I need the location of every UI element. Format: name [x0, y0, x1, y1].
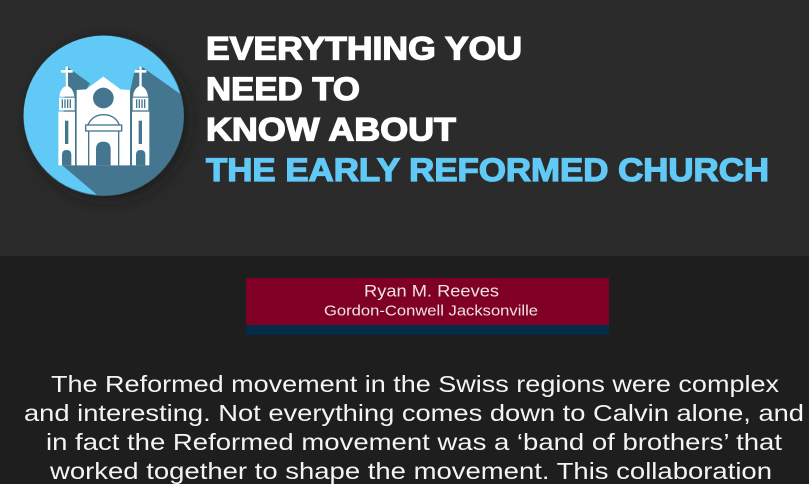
- intro text block: The Reformed movement in the Swiss regions were complex: [51, 371, 780, 397]
- title: [206, 30, 769, 188]
- title line 1: EVERYTHING YOU: [206, 30, 522, 66]
- panel: header background: [0, 0, 809, 256]
- intro text block: and interesting. Not everything comes down to Calvin alone, and: [24, 400, 804, 426]
- title line 2: NEED TO: [206, 71, 360, 107]
- intro text block: in fact the Reformed movement was a ‘band of brothers’ that: [46, 429, 783, 455]
- panel: body background: [0, 256, 809, 484]
- banner navy stripe: [246, 325, 609, 335]
- author institution: Gordon-Conwell Jacksonville: [324, 304, 538, 320]
- intro text block: worked together to shape the movement. This collaboration: [49, 458, 772, 484]
- title line 3: KNOW ABOUT: [206, 112, 456, 148]
- banner red panel: [246, 278, 609, 325]
- title line 4 highlighted: THE EARLY REFORMED CHURCH: [206, 152, 769, 188]
- icon: church in circle: [23, 35, 190, 200]
- author banner: [246, 278, 609, 335]
- intro text block: [24, 371, 804, 484]
- author name: Ryan M. Reeves: [364, 282, 499, 300]
